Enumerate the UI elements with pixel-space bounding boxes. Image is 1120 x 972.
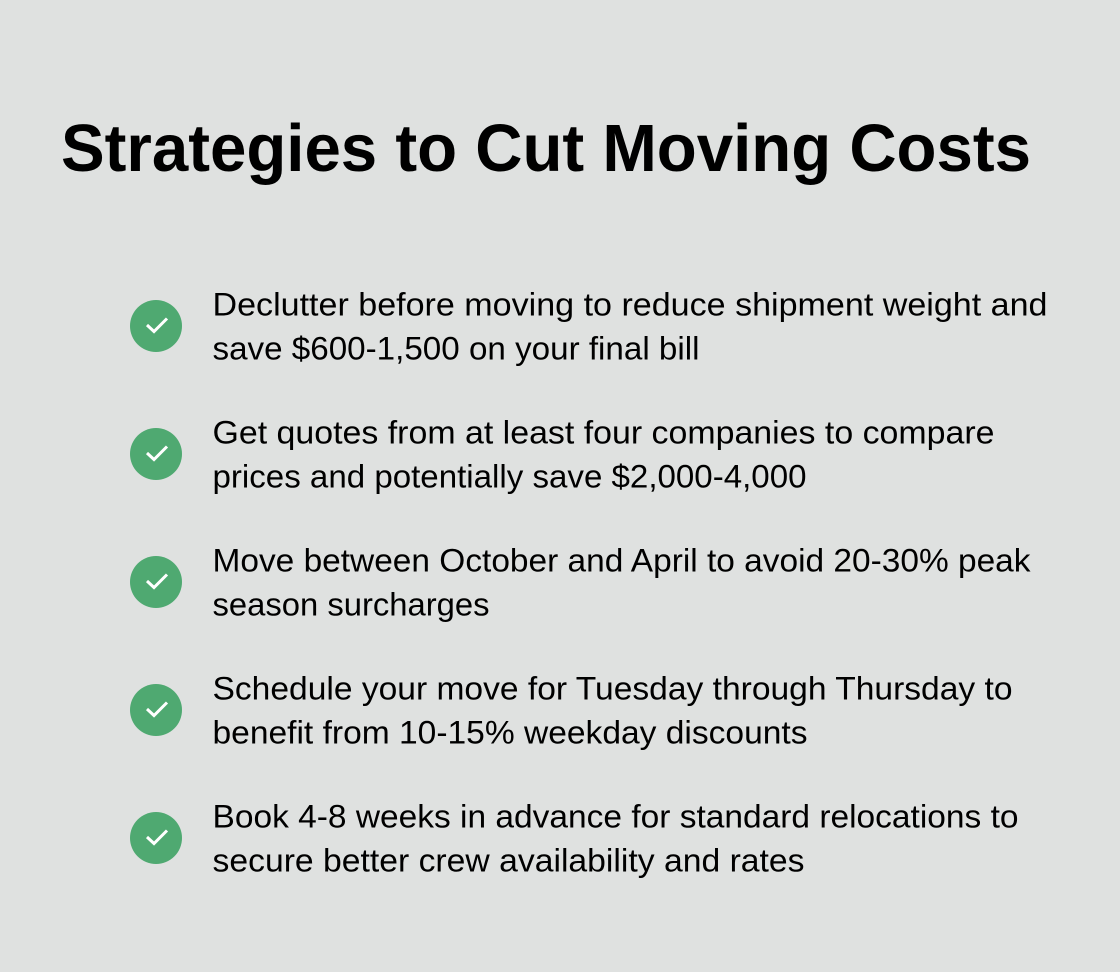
text: item 4: benefit from 10-15% weekday discounts [212,714,808,750]
text: item 3: season surcharges [212,586,490,622]
icon: check 2 [130,428,182,480]
text: item 3: Move between October and April to avoid 20-30% peak [212,542,1032,578]
text: item 1: save $600-1,500 on your final bill [212,330,700,366]
title: Strategies to Cut Moving Costs [61,111,1031,186]
text: item 5: Book 4-8 weeks in advance for standard relocations to [212,798,1018,834]
text: item 5: secure better crew availability and rates [212,842,805,878]
text: item 2: prices and potentially save $2,000-4,000 [212,458,806,494]
list item 5 [130,798,1018,878]
icon: check 5 [130,812,182,864]
icon: check 1 [130,300,182,352]
icon: check 4 [130,684,182,736]
text: item 2: Get quotes from at least four companies to compare [212,414,994,450]
text: item 1 [212,286,1048,366]
text: item 4 [212,670,1012,750]
icon: check 3 [130,556,182,608]
list item 4 [130,670,1012,750]
list item 1 [130,286,1048,366]
text: item 5 [212,798,1018,878]
text: item 1: Declutter before moving to reduce shipment weight and [212,286,1048,322]
list item 3 [130,542,1032,622]
list item 2 [130,414,994,494]
text: item 4: Schedule your move for Tuesday through Thursday to [212,670,1012,706]
text: item 2 [212,414,994,494]
text: item 3 [212,542,1032,622]
